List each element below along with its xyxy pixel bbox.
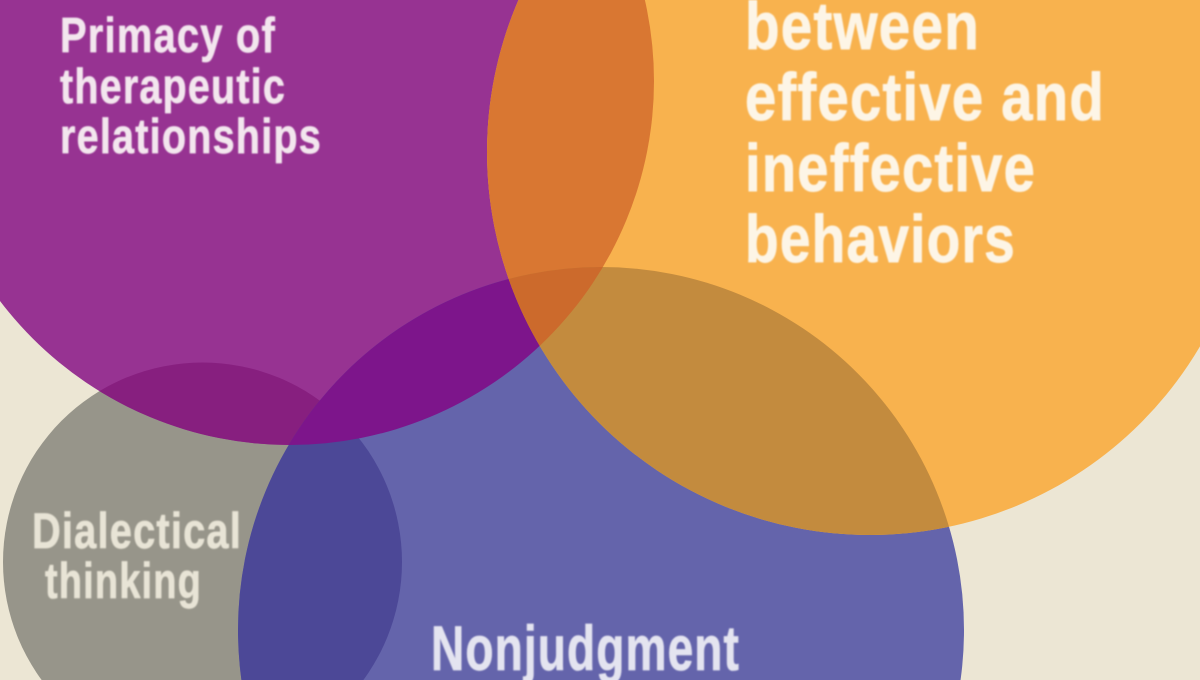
label: dialectical thinking: thinking: [45, 553, 202, 609]
label: primacy of therapeutic relationships: relationships: [60, 110, 322, 164]
label: primacy of therapeutic relationships: [60, 9, 322, 164]
label: between effective and ineffective behaviors: [745, 0, 1105, 277]
overlap: orange and blue: [508, 267, 949, 535]
label: between effective and ineffective behaviors: effective and: [745, 60, 1105, 135]
circle: orange: [487, 0, 1200, 535]
overlap: purple, orange and blue: [508, 267, 603, 346]
circle: purple: [0, 0, 654, 445]
overlap: gray and purple: [100, 362, 320, 445]
overlap: purple and orange: [487, 0, 654, 346]
circle: gray: [3, 362, 402, 680]
overlap: purple and blue: [288, 279, 540, 445]
label: dialectical thinking: Dialectical: [32, 503, 242, 559]
label: between effective and ineffective behaviors: behaviors: [745, 202, 1016, 277]
label: primacy of therapeutic relationships: therapeutic: [60, 60, 286, 114]
overlap: gray and blue: [238, 401, 402, 680]
label: primacy of therapeutic relationships: Primacy of: [60, 9, 276, 63]
label: dialectical thinking: [32, 503, 242, 609]
circle: blue: [238, 267, 964, 680]
label: between effective and ineffective behaviors: ineffective: [745, 131, 1036, 206]
